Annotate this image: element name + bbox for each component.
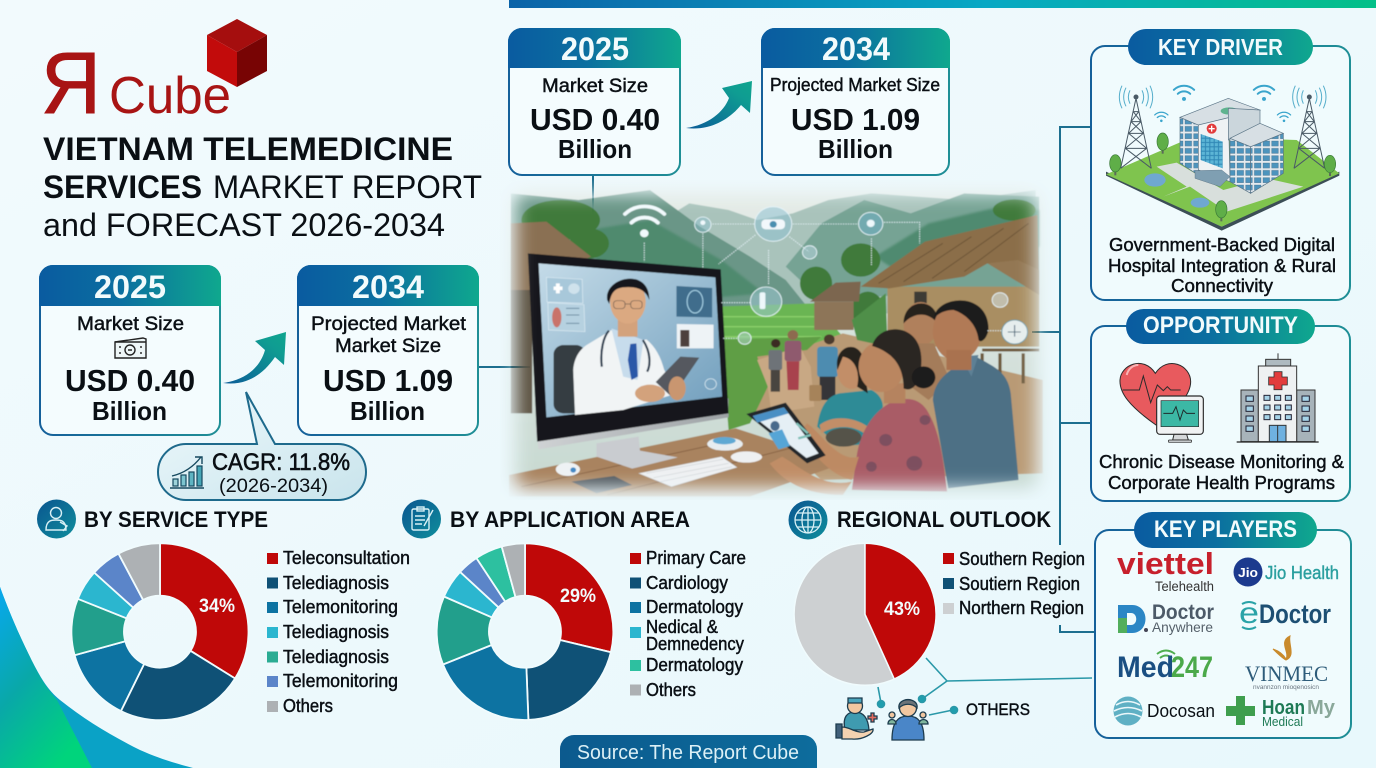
logo wordmark (41, 35, 231, 132)
logo: Med247: 247 (1171, 651, 1213, 684)
opportunity text (1099, 451, 1345, 493)
screen panels (546, 277, 716, 389)
heading: by application area: BY APPLICATION AREA (450, 507, 690, 532)
logo: Hoan My Medical: Medical (1262, 714, 1303, 729)
key driver text: Connectivity (1171, 275, 1274, 296)
logo: Hoan My Medical: My (1307, 697, 1336, 719)
legend: application area: Primary Care (646, 548, 746, 568)
value label: 43%: 43% (884, 599, 920, 620)
card: top 2025 market size: 2025 (561, 31, 629, 67)
icon: patient group (888, 700, 928, 740)
logo cube (207, 19, 267, 87)
ground path (750, 333, 1043, 480)
key driver text: Hospital Integration & Rural (1108, 255, 1336, 276)
title: SERVICES (43, 169, 202, 205)
small hut (810, 282, 861, 302)
key players badge: KEY PLAYERS (1154, 516, 1297, 543)
logo: Hoan My Medical: Hoan (1262, 697, 1305, 719)
card: 2034 projected market size: 2034 (352, 269, 424, 305)
logo: RCube (41, 19, 267, 132)
logo: Doctor Anywhere: Doctor (1152, 601, 1214, 624)
callout: CAGR (158, 392, 366, 500)
logo: Vinmec: VINMEC (1245, 661, 1328, 686)
legend: application area: Cardiology (646, 573, 728, 593)
heading: regional outlook: REGIONAL OUTLOOK (837, 507, 1052, 532)
building (1180, 117, 1198, 175)
legend: service type: Telediagnosis (283, 647, 389, 667)
card: top 2025 market size (508, 28, 681, 175)
tablet (746, 403, 826, 463)
source bar (560, 735, 817, 768)
logo: Med247: Med (1117, 651, 1174, 684)
icon: heart with monitor (1120, 363, 1203, 442)
legend: application area (630, 548, 746, 700)
logo: viettel: viettel (1117, 546, 1214, 581)
card: 2034 projected market size: Projected Market (311, 313, 467, 335)
icon: growth chart (170, 457, 204, 488)
icon: hospital (1237, 353, 1319, 442)
logo: Med247 (1117, 650, 1213, 684)
logo: Jio Health: Jio Health (1265, 563, 1339, 583)
man (933, 356, 1019, 488)
leader lines and dots (878, 658, 1092, 715)
panel: key players (1095, 512, 1351, 738)
monitor (528, 253, 729, 469)
key driver text (1108, 234, 1336, 296)
family (746, 300, 1019, 495)
logo: eDoctor: Doctor (1259, 599, 1331, 629)
logo: Jio Health: Jio (1238, 565, 1258, 580)
opportunity text: Corporate Health Programs (1108, 472, 1335, 493)
logo: Vinmec: nvannzon mioqenosicn (1253, 685, 1319, 691)
bottom-left swoosh (0, 587, 193, 768)
pie chart: regional (794, 543, 936, 685)
key driver badge (1128, 29, 1313, 65)
card: 2025 market size: Billion (92, 396, 167, 426)
table (509, 428, 843, 497)
logo: Jio Health (1234, 558, 1339, 586)
legend: service type: Telediagnosis (283, 573, 389, 593)
card: 2025 market size (39, 265, 221, 435)
legend: regional: Southern Region (959, 549, 1085, 569)
legend: service type: Telemonitoring (283, 671, 398, 691)
logo: viettel (1117, 546, 1214, 594)
panel: opportunity (1091, 309, 1350, 501)
card: 2034 projected market size: Market Size (335, 335, 441, 357)
villagers in background (769, 330, 838, 401)
legend: service type: Telemonitoring (283, 597, 398, 617)
title: and FORECAST 2026-2034 (43, 207, 445, 243)
rice field (722, 302, 841, 358)
key players badge (1134, 512, 1317, 548)
card: 2034 projected market size: USD 1.09 (323, 363, 453, 398)
value label: 34%: 34% (199, 596, 235, 617)
card: top 2025 market size: Billion (558, 134, 632, 164)
arrow: growth left (223, 332, 286, 384)
section: by application area (402, 500, 746, 720)
callout: CAGR: CAGR: 11.8% (212, 449, 350, 476)
legend: application area: Demnedency (646, 634, 744, 654)
arrow: growth top (686, 81, 752, 129)
legend: application area: Nedical & (646, 617, 718, 637)
card: 2034 projected market size: Billion (350, 396, 425, 426)
opportunity badge (1126, 309, 1315, 344)
donut chart: application area (437, 543, 613, 720)
card: top 2025 market size: USD 0.40 (530, 102, 660, 137)
label: others: OTHERS (966, 700, 1030, 719)
trees (521, 199, 1036, 328)
card: top 2034 projected market size: USD 1.09 (791, 102, 920, 137)
legend: regional (943, 549, 1085, 618)
legend: service type (267, 548, 410, 716)
logo: viettel: Telehealth (1155, 579, 1214, 594)
logo: Vinmec (1245, 636, 1328, 691)
opportunity badge: OPPORTUNITY (1143, 312, 1298, 339)
girl (817, 390, 883, 447)
legend: application area: Others (646, 680, 696, 700)
source bar: Source: The Report Cube (577, 742, 799, 764)
legend: service type: Telediagnosis (283, 622, 389, 642)
bush (852, 293, 887, 347)
panel: key driver (1091, 29, 1350, 300)
card: 2025 market size: 2025 (94, 269, 166, 305)
legend: application area: Dermatology (646, 597, 743, 617)
heading: regional outlook (788, 500, 1052, 540)
top accent bar (509, 0, 1376, 8)
legend: regional: Soutiern Region (959, 574, 1080, 594)
logo: Hoan My Medical (1226, 696, 1336, 729)
legend: service type: Teleconsultation (283, 548, 410, 568)
back woman (904, 301, 934, 344)
heading: by application area (402, 500, 690, 538)
logo: Doctor Anywhere: Anywhere (1152, 619, 1213, 635)
section: regional outlook (788, 500, 1092, 740)
network overlay (644, 207, 1027, 344)
title: VIETNAM TELEMEDICINE (43, 131, 453, 167)
card: top 2034 projected market size: Billion (818, 134, 893, 164)
connector lines (478, 127, 1095, 632)
logo: Docosan: Docosan (1147, 700, 1215, 721)
card: top 2034 projected market size: Projected Market Size (770, 75, 940, 95)
card: top 2034 projected market size: 2034 (822, 31, 890, 67)
icon: money (115, 338, 146, 358)
desk items (556, 437, 762, 493)
callout: CAGR: (2026-2034) (219, 476, 328, 497)
heading: by service type (37, 500, 268, 538)
card: top 2034 projected market size (761, 28, 950, 175)
logo: Docosan (1114, 696, 1215, 726)
key driver text: Government-Backed Digital (1109, 234, 1335, 255)
legend: regional: Northern Region (959, 598, 1084, 618)
title (43, 131, 482, 243)
value label: 29%: 29% (560, 586, 596, 607)
logo wordmark: Cube (109, 67, 231, 125)
icon: doctor with caring hand (836, 698, 877, 739)
legend: application area: Dermatology (646, 655, 743, 675)
legend: service type: Others (283, 696, 333, 716)
logo: eDoctor: e (1239, 597, 1259, 630)
doctor (554, 279, 699, 415)
illustration: connected hospital (1106, 86, 1339, 231)
logo: eDoctor (1239, 597, 1331, 630)
woman (852, 399, 947, 492)
logo wordmark: Я (41, 35, 101, 132)
logo: Doctor Anywhere (1118, 601, 1214, 635)
donut chart: service type (71, 543, 248, 720)
card: top 2025 market size: Market Size (542, 75, 648, 97)
card: 2034 projected market size (297, 265, 479, 435)
card: 2025 market size: Market Size (77, 313, 184, 335)
large hut (887, 287, 1039, 347)
title: MARKET REPORT (213, 169, 482, 205)
opportunity text: Chronic Disease Monitoring & (1099, 451, 1345, 472)
card: 2025 market size: USD 0.40 (65, 363, 195, 398)
hero illustration: rural telemedicine scene (500, 180, 1060, 500)
key driver badge: KEY DRIVER (1158, 34, 1283, 60)
section: by service type (37, 500, 410, 720)
left hut (511, 222, 591, 293)
heading: by service type: BY SERVICE TYPE (84, 507, 268, 532)
